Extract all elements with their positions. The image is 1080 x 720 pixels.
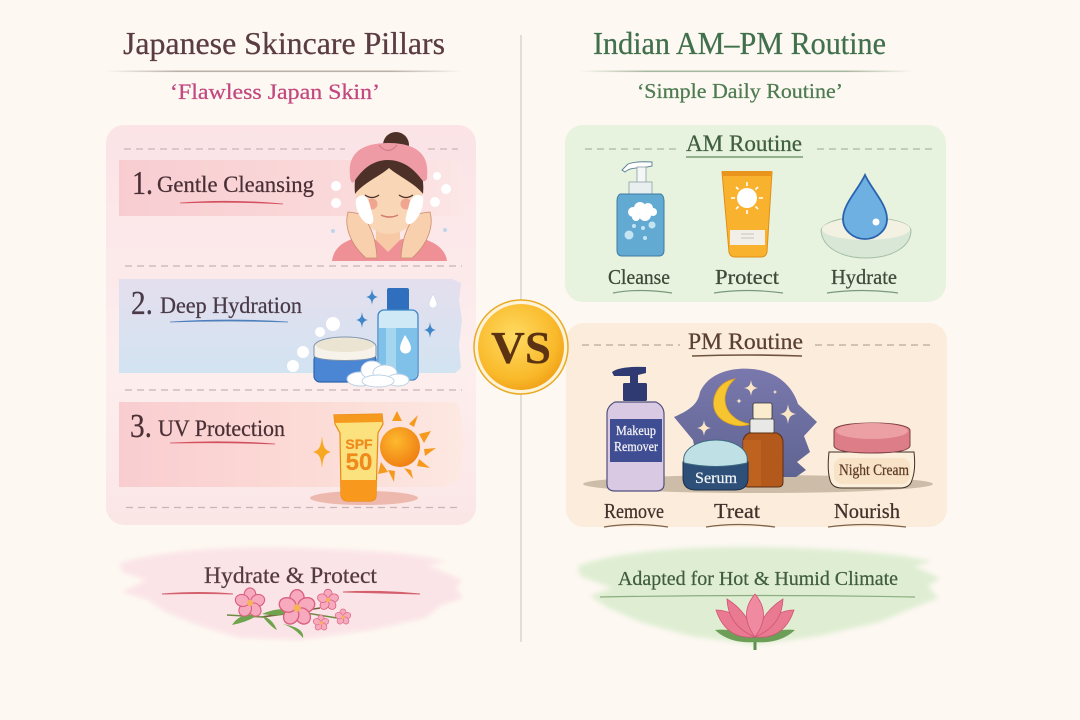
icon: sunscreen tube [722, 171, 772, 257]
panel: PM Routine [566, 323, 947, 527]
subtitle: Flawless Japan Skin: ‘Flawless Japan Skin’ [170, 79, 380, 104]
footer: Hydrate & Protect: Hydrate & Protect [204, 563, 378, 588]
title: Indian AM-PM Routine: Indian AM–PM Routine [593, 25, 886, 61]
icon: makeup remover bottle [607, 367, 664, 491]
icon: makeup remover bottle: Makeup [616, 424, 656, 439]
icon: water drop in bowl [821, 175, 911, 258]
centre divider [520, 35, 522, 642]
icon: night cream jar: Night Cream [839, 462, 909, 479]
label: Hydrate: Hydrate [831, 265, 897, 289]
icon: night cream jar [828, 423, 915, 488]
pillar 1: Gentle Cleansing: Gentle Cleansing [157, 172, 314, 197]
panel: AM Routine: AM Routine [686, 131, 802, 156]
icon: SPF 50 sunscreen and sun: 50 [346, 449, 372, 476]
icon: hydration products [287, 288, 437, 387]
icon: SPF 50 sunscreen and sun: SPF [345, 436, 373, 452]
pillar 2: Deep Hydration: Deep Hydration [160, 293, 302, 318]
pillar 2: Deep Hydration [119, 279, 462, 387]
title: Japanese Skincare Pillars: Japanese Skincare Pillars [123, 25, 445, 61]
icon: woman washing face [331, 132, 451, 261]
VS badge: VS [491, 322, 551, 373]
pillar 3: UV Protection [119, 402, 463, 505]
icon: night sky backdrop [674, 369, 817, 477]
panel: AM Routine [565, 125, 946, 302]
icon: serum jar: Serum [695, 470, 738, 487]
label: Remove: Remove [604, 499, 664, 523]
label: Nourish: Nourish [834, 499, 900, 523]
icon: cherry blossom branch [227, 588, 352, 638]
panel: PM Routine: PM Routine [688, 329, 803, 354]
pillar 1: Gentle Cleansing: 1. [132, 165, 153, 202]
pillar 1: Gentle Cleansing [119, 132, 464, 261]
label: Treat: Treat [714, 499, 760, 523]
footer: Adapted for Hot & Humid Climate [578, 547, 940, 650]
icon: amber dropper bottle [743, 403, 783, 487]
pillar 2: Deep Hydration: 2. [131, 285, 153, 322]
icon: makeup remover bottle: Remover [614, 440, 658, 455]
label: Protect: Protect [715, 265, 779, 289]
label: Treat [706, 499, 775, 527]
icon: lotus flower [715, 594, 795, 650]
subtitle: Simple Daily Routine: ‘Simple Daily Routine’ [637, 79, 843, 103]
icon: cleanser pump bottle [617, 162, 664, 256]
label: Cleanse: Cleanse [608, 265, 670, 289]
pillar 3: UV Protection: 3. [130, 408, 152, 445]
footer: Hydrate & Protect [120, 547, 463, 640]
panel: Japanese pillars [106, 125, 476, 525]
icon: SPF 50 sunscreen and sun [310, 411, 436, 505]
shelf shadow [583, 475, 933, 493]
VS badge [474, 300, 568, 394]
icon: serum jar [683, 440, 748, 490]
footer: Adapted for Hot & Humid Climate: Adapted for Hot & Humid Climate [618, 568, 898, 590]
pillar 3: UV Protection: UV Protection [158, 416, 285, 441]
